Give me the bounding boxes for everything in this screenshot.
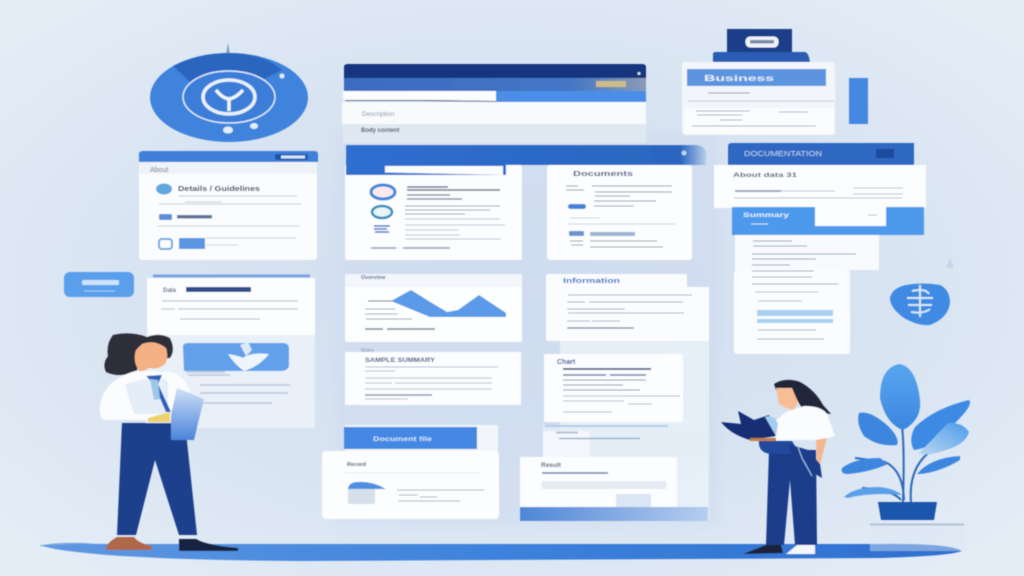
icon: list item 1 bbox=[156, 184, 172, 194]
callout: blue pill bbox=[64, 272, 134, 297]
panel: right text card upper bbox=[546, 274, 709, 341]
heading: Result bbox=[541, 462, 562, 469]
figure: right person bbox=[721, 380, 835, 554]
panel: right text card lower bbox=[544, 354, 683, 422]
panel: bottom right card bbox=[520, 457, 708, 521]
heading: Documents bbox=[573, 169, 633, 178]
book bbox=[721, 411, 776, 440]
icon: ring bbox=[372, 206, 392, 218]
tie bbox=[146, 375, 171, 412]
label: About bbox=[150, 167, 168, 174]
shoes bbox=[106, 537, 152, 550]
icon: folder bbox=[348, 488, 375, 504]
heading: Record bbox=[347, 462, 366, 468]
panel: top right card bbox=[682, 62, 835, 135]
panel: centre header with two cards bbox=[345, 145, 706, 260]
label: Overview bbox=[361, 275, 386, 281]
icon: currency badge bbox=[890, 284, 950, 325]
panel: left document bbox=[146, 276, 315, 428]
pants bbox=[766, 450, 817, 545]
document bbox=[171, 388, 204, 440]
shirt bbox=[772, 406, 835, 440]
pot bbox=[878, 502, 937, 520]
stems bbox=[855, 420, 935, 502]
hair bbox=[104, 333, 173, 375]
panel: notes card bbox=[345, 348, 521, 405]
shirt bbox=[100, 371, 190, 420]
pants bbox=[117, 423, 197, 535]
hair bbox=[774, 380, 831, 414]
icon: faint arrow bbox=[946, 258, 954, 268]
icon: app bubble bbox=[371, 185, 395, 199]
floor shadow bbox=[42, 544, 962, 561]
icon: list item 3 bbox=[159, 239, 172, 249]
icon: folder stand bbox=[713, 29, 810, 63]
text lines bbox=[407, 187, 500, 190]
heading: SAMPLE SUMMARY bbox=[365, 358, 435, 364]
figure: left person bbox=[100, 333, 238, 551]
heading: Business bbox=[704, 74, 775, 83]
label: About data 31 bbox=[733, 172, 798, 179]
icon: blue bookmark bar bbox=[849, 78, 868, 124]
banner with heart bbox=[183, 343, 289, 371]
face bbox=[135, 342, 167, 372]
label: Summary bbox=[743, 213, 790, 219]
face bbox=[776, 388, 798, 410]
soft backing panel bbox=[335, 130, 720, 525]
heading: DOCUMENTATION bbox=[744, 151, 822, 158]
icon: wave bbox=[374, 226, 390, 232]
panel: top centre card bbox=[342, 64, 646, 143]
shoes bbox=[743, 545, 783, 554]
heading: Data bbox=[163, 288, 177, 294]
panel: small form strip bbox=[543, 425, 709, 457]
panel: left list card bbox=[139, 151, 318, 260]
panel: right stacked document bbox=[714, 143, 926, 354]
label: Notes bbox=[361, 348, 375, 354]
panel: right translucent backing bbox=[560, 287, 709, 520]
panel: bottom left card bbox=[322, 425, 499, 519]
arm bbox=[816, 438, 827, 466]
panel: area chart card bbox=[345, 274, 522, 342]
heading: Details / Guidelines bbox=[178, 184, 260, 193]
icon: potted plant bbox=[842, 364, 970, 551]
heading: Information bbox=[563, 278, 620, 285]
label: Document file bbox=[373, 437, 433, 443]
area chart bbox=[391, 290, 506, 317]
heading: Chart bbox=[557, 359, 576, 366]
label: Description bbox=[362, 111, 395, 118]
icon: list item 2 bbox=[159, 214, 172, 220]
label: Body content bbox=[361, 128, 399, 134]
icon: circular emblem bbox=[150, 43, 308, 142]
leaves bbox=[880, 364, 920, 430]
